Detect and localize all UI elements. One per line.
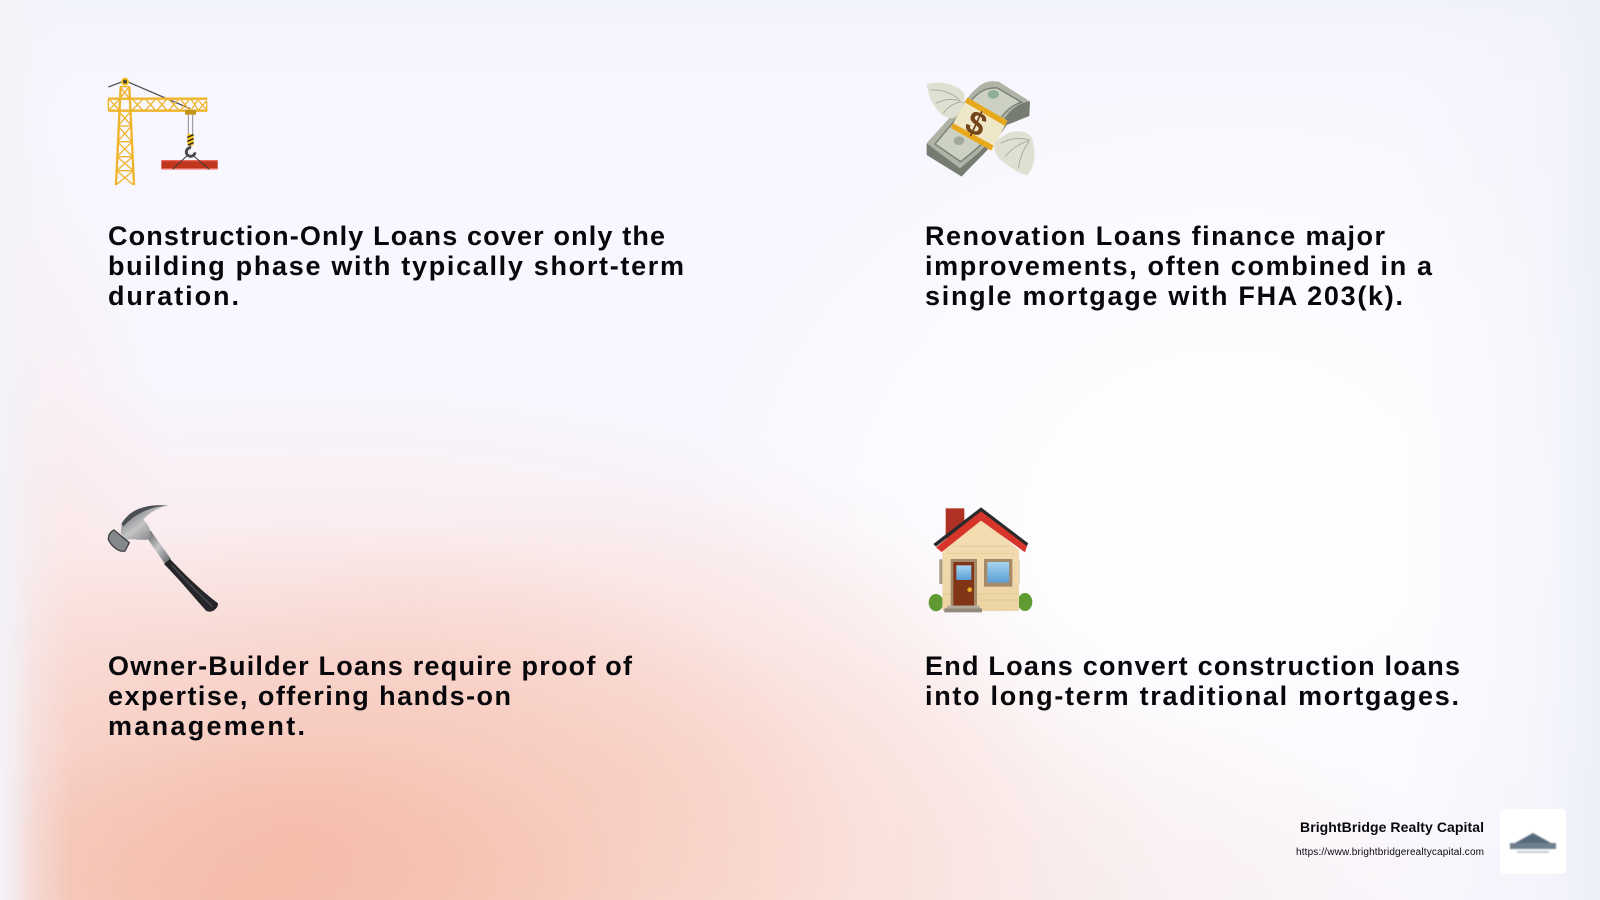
text: construction-only loans: building phase with typically short-term <box>108 251 684 281</box>
icon: tower crane <box>108 78 218 185</box>
logo <box>1500 809 1566 874</box>
text: owner-builder loans: management. <box>108 711 305 741</box>
text: renovation loans: improvements, often combined in a <box>925 251 1433 281</box>
text: renovation loans: single mortgage with FHA 203(k). <box>925 281 1403 311</box>
text: end loans <box>925 651 1460 711</box>
text: renovation loans <box>925 221 1433 311</box>
icon: hammer <box>108 505 218 612</box>
text: renovation loans: Renovation Loans finance major <box>925 221 1385 251</box>
icon: money with wings: $ <box>960 104 992 145</box>
text: owner-builder loans: expertise, offering hands-on <box>108 681 511 711</box>
icon: money with wings <box>927 81 1035 177</box>
text: owner-builder loans: Owner-Builder Loans require proof of <box>108 651 633 681</box>
panel: construction-only loans <box>108 78 684 311</box>
footer: brand <box>1296 809 1566 874</box>
panel: owner-builder loans <box>108 505 633 741</box>
text: end loans: into long-term traditional mortgages. <box>925 681 1459 711</box>
text: end loans: End Loans convert construction loans <box>925 651 1460 681</box>
text: construction-only loans: Construction-Only Loans cover only the <box>108 221 665 251</box>
brand url: https://www.brightbridgerealtycapital.com <box>1296 847 1484 858</box>
text: construction-only loans <box>108 221 684 311</box>
panel: end loans <box>925 507 1460 711</box>
brand name: BrightBridge Realty Capital <box>1300 819 1484 835</box>
icon: house <box>929 507 1032 612</box>
text: owner-builder loans <box>108 651 633 741</box>
text: construction-only loans: duration. <box>108 281 239 311</box>
panel: renovation loans <box>925 81 1433 311</box>
